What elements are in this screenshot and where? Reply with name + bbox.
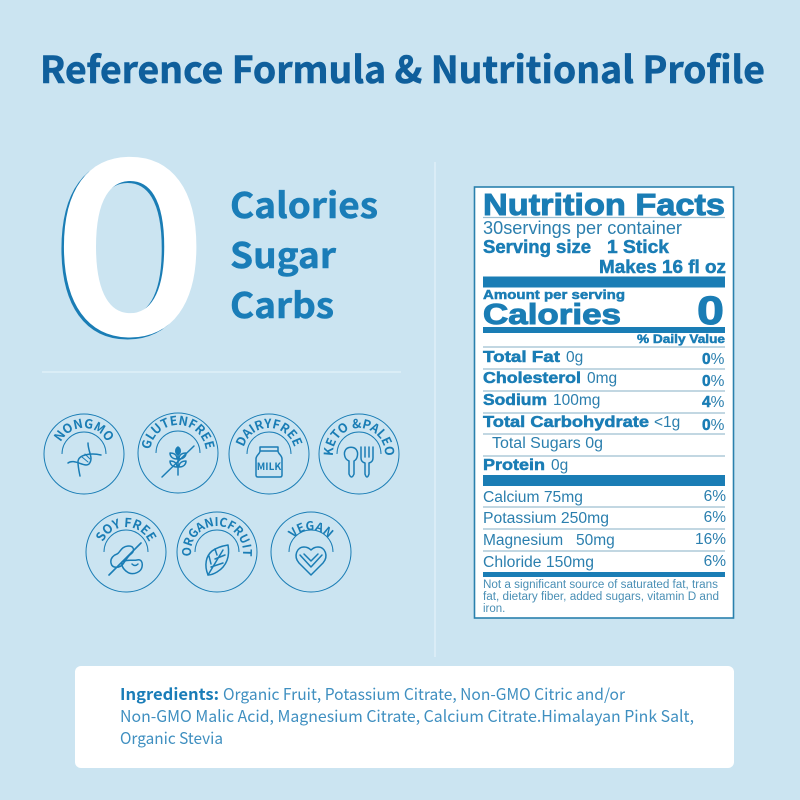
icon: crossed-out wheat bbox=[162, 446, 194, 477]
row: calcium bbox=[483, 488, 726, 506]
row: total carbohydrate bbox=[483, 414, 725, 434]
servings info: Makes 16 fl oz bbox=[599, 257, 726, 277]
row: cholesterol: 0% bbox=[702, 373, 725, 390]
calories row bbox=[483, 287, 724, 333]
badge: vegan: VEGAN bbox=[287, 521, 334, 538]
footnote: Not a significant source of saturated fat, trans bbox=[483, 579, 718, 591]
row: magnesium: 16% bbox=[695, 531, 726, 548]
row: total fat: 0g bbox=[566, 349, 583, 366]
servings info: Serving size bbox=[483, 237, 591, 257]
row: total carbohydrate: <1g bbox=[654, 414, 680, 431]
row: potassium: Potassium 250mg bbox=[483, 510, 609, 527]
servings info bbox=[483, 218, 726, 277]
servings info: 1 Stick bbox=[607, 237, 670, 257]
servings info: 30servings per container bbox=[483, 218, 682, 238]
row: cholesterol: 0mg bbox=[587, 370, 617, 387]
row: potassium bbox=[483, 509, 726, 527]
row: sodium bbox=[483, 392, 725, 411]
calories row: 0 bbox=[697, 289, 724, 333]
row: protein: 0g bbox=[551, 457, 568, 474]
row: magnesium: 50mg bbox=[576, 532, 615, 549]
row: total fat bbox=[483, 349, 725, 368]
row: total carbohydrate: Total Carbohydrate bbox=[483, 414, 649, 431]
row: sodium: 100mg bbox=[553, 392, 600, 409]
badge: soy free bbox=[86, 512, 166, 592]
row: sodium: Sodium bbox=[483, 392, 547, 409]
daily value header: % Daily Value bbox=[637, 332, 725, 346]
row: protein bbox=[483, 457, 568, 474]
big zero numeral: 0 bbox=[52, 62, 203, 401]
ingredients text: Organic Fruit, Potassium Citrate, Non-GMO Citric and/or bbox=[223, 681, 626, 705]
row: cholesterol bbox=[483, 370, 725, 390]
icon: DNA helix bbox=[68, 443, 101, 476]
badge: organic fruit: ORGANICFRUIT bbox=[182, 517, 252, 556]
row: protein: Protein bbox=[483, 457, 545, 474]
panel: ingredients bbox=[75, 666, 734, 768]
zero claims list: Carbs bbox=[230, 278, 334, 329]
badge: gluten free: GLUTENFREE bbox=[142, 416, 215, 449]
row: potassium: 6% bbox=[704, 509, 726, 526]
badge: non-GMO: NONGMO bbox=[54, 418, 113, 442]
icon: heart with V bbox=[296, 547, 326, 575]
footnote bbox=[483, 579, 719, 615]
ingredients text bbox=[120, 681, 694, 749]
badge: dairy free: DAIRYFREE bbox=[236, 418, 302, 446]
icon: milk bottle: MILK bbox=[257, 458, 281, 473]
badge: non-GMO bbox=[44, 414, 124, 494]
calories row: Amount per serving bbox=[483, 287, 625, 302]
calories row: Calories bbox=[483, 299, 621, 331]
big zero numeral: 0 bbox=[54, 60, 206, 399]
icon: leaf bbox=[206, 545, 229, 575]
badge: keto and paleo bbox=[318, 414, 400, 494]
icon: spoon and fork bbox=[344, 447, 373, 477]
title: Reference Formula & Nutritional Profile bbox=[40, 40, 765, 94]
footnote: iron. bbox=[483, 603, 505, 615]
badge: organic fruit bbox=[176, 512, 258, 592]
row: magnesium bbox=[483, 531, 726, 549]
icon: crossed-out soy beans bbox=[109, 543, 142, 575]
nutrition facts heading: Nutrition Facts bbox=[483, 187, 725, 222]
row: chloride: Chloride 150mg bbox=[483, 554, 594, 571]
zero claims list: Sugar bbox=[230, 228, 337, 279]
row: calcium: 6% bbox=[704, 488, 726, 505]
ingredients text: Organic Stevia bbox=[120, 725, 223, 749]
panel: nutrition facts bbox=[474, 187, 734, 618]
badge: dairy free bbox=[228, 414, 310, 494]
row: sodium: 4% bbox=[702, 394, 725, 411]
row: total carbohydrate: 0% bbox=[702, 417, 725, 434]
footnote: fat, dietary fiber, added sugars, vitamin D and bbox=[483, 591, 719, 603]
badge: soy free: SOY FREE bbox=[96, 518, 157, 542]
row: total sugars: Total Sugars 0g bbox=[492, 435, 603, 452]
row: cholesterol: Cholesterol bbox=[483, 370, 581, 387]
badge: keto and paleo: KETO &PALEO bbox=[324, 418, 394, 455]
row: magnesium: Magnesium bbox=[483, 532, 563, 549]
row: chloride: 6% bbox=[704, 553, 726, 570]
row: calcium: Calcium 75mg bbox=[483, 489, 583, 506]
zero claims list bbox=[230, 178, 378, 329]
row: chloride bbox=[483, 553, 726, 571]
row: total fat: 0% bbox=[702, 351, 725, 368]
ingredients text: Ingredients: bbox=[120, 681, 219, 705]
badge: gluten free bbox=[138, 412, 218, 494]
row: total fat: Total Fat bbox=[483, 349, 560, 366]
ingredients text: Non-GMO Malic Acid, Magnesium Citrate, Calcium Citrate.Himalayan Pink Salt, bbox=[120, 703, 694, 727]
badge: vegan bbox=[270, 512, 352, 592]
zero claims list: Calories bbox=[230, 178, 378, 229]
